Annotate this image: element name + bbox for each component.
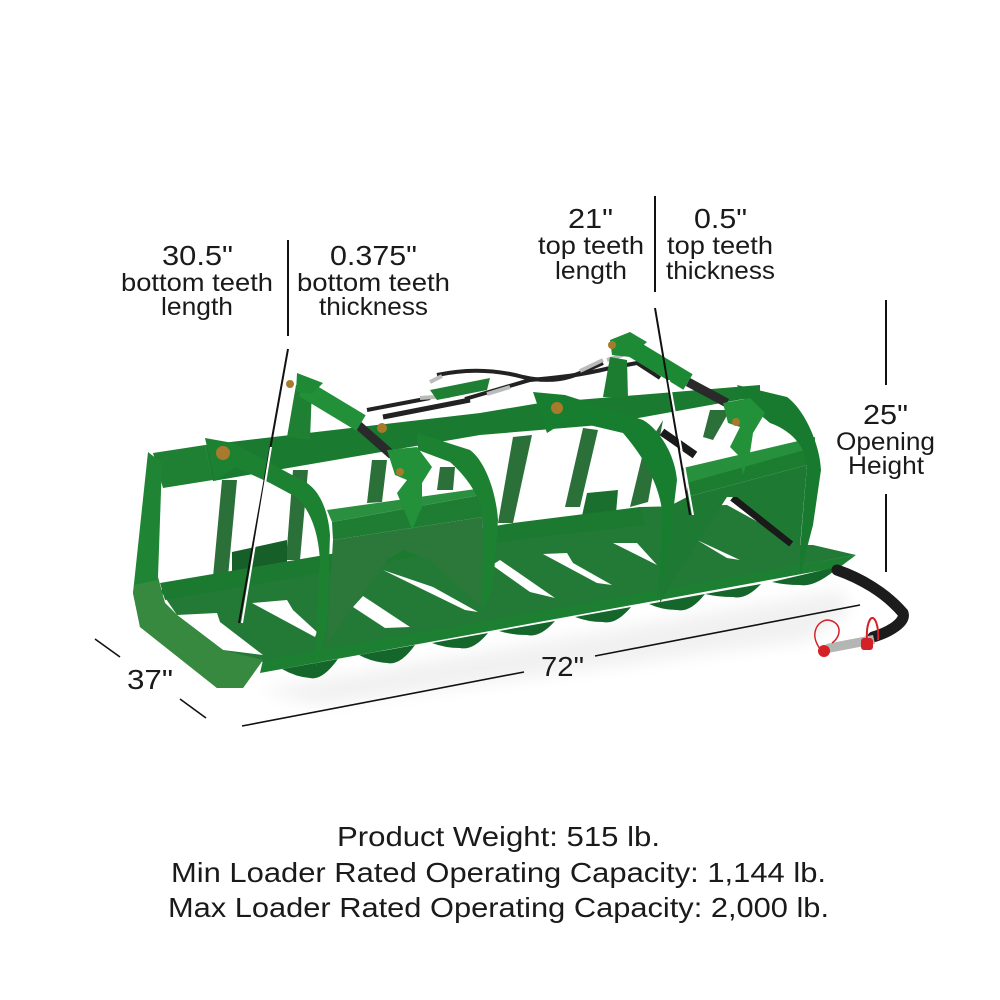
leader line: top teeth — [655, 308, 693, 515]
right grapple plate — [660, 465, 807, 603]
hose fittings — [420, 355, 623, 398]
dimension: opening height: 25" — [863, 399, 908, 430]
left cylinder barrel — [303, 388, 361, 423]
callout: top teeth length: length — [555, 257, 627, 285]
dimension: depth 37 — [95, 639, 206, 718]
left grapple beam front — [332, 493, 492, 540]
left end plate — [133, 452, 263, 688]
callout: top teeth thickness: top teeth — [667, 232, 773, 260]
pivot bolts — [216, 380, 404, 476]
callout: bottom teeth length: length — [161, 293, 233, 321]
right cylinder barrel — [627, 345, 688, 382]
left grapple tower — [287, 385, 312, 440]
callout: top teeth thickness: 0.5" — [694, 203, 747, 234]
callout: bottom teeth length: 30.5" — [162, 240, 233, 271]
specifications text: Max Loader Rated Operating Capacity: 2,000 lb. — [168, 892, 829, 923]
left rail end — [153, 445, 213, 488]
callout: bottom teeth thickness: bottom teeth — [297, 269, 450, 297]
leader line: bottom teeth — [239, 349, 288, 623]
specifications text: Product Weight: 515 lb. — [337, 821, 660, 852]
right grapple beam front — [687, 447, 815, 497]
left grapple arch far — [417, 433, 498, 613]
dimension: width 72 — [242, 605, 860, 726]
callout: bottom teeth length — [121, 240, 273, 321]
floor rail — [160, 507, 645, 600]
dimension: width 72: 72" — [541, 651, 584, 682]
callout: top teeth thickness — [666, 203, 775, 285]
left end plate lower — [133, 580, 263, 688]
callout: top teeth length: top teeth — [538, 232, 644, 260]
back top rail — [205, 385, 760, 481]
right cylinder top mount — [610, 332, 647, 357]
right grapple arch near — [533, 392, 677, 603]
floor with teeth — [160, 505, 856, 662]
divider: bottom teeth callout — [287, 240, 289, 336]
callout: top teeth length: 21" — [568, 203, 613, 234]
floor shadow — [260, 590, 850, 705]
dimension: depth 37: 37" — [127, 664, 173, 695]
gaps between teeth — [177, 540, 740, 655]
front bar — [260, 555, 856, 673]
left cylinder rod — [358, 425, 392, 455]
dimension: opening height: Height — [848, 452, 924, 480]
main hose and couplers — [815, 570, 903, 657]
hose through right window — [733, 497, 792, 543]
hydraulic hoses — [367, 363, 660, 417]
left cylinder lower bracket — [387, 447, 432, 530]
specifications text — [168, 821, 829, 923]
product: root grapple attachment — [133, 332, 903, 688]
left grapple plate — [327, 517, 483, 643]
left grapple arch near — [205, 438, 330, 668]
right grapple tower — [603, 357, 628, 398]
dimension: opening height: Opening — [836, 428, 935, 456]
right cylinder lower bracket — [723, 398, 765, 475]
left cylinder top mount — [296, 373, 323, 394]
specifications text: Min Loader Rated Operating Capacity: 1,144 lb. — [171, 857, 826, 888]
back tabs — [232, 540, 287, 590]
dimension: opening height — [836, 300, 935, 572]
callout: top teeth thickness: thickness — [666, 257, 775, 285]
callout: bottom teeth thickness: thickness — [319, 293, 428, 321]
callout: bottom teeth thickness: 0.375" — [330, 240, 417, 271]
right grapple beam top — [683, 437, 815, 483]
callout: bottom teeth length: bottom teeth — [121, 269, 273, 297]
right cylinder rod — [688, 382, 727, 403]
valve block — [430, 378, 490, 400]
left grapple beam top — [327, 487, 492, 522]
right grapple arch far — [737, 385, 821, 575]
divider: top teeth callout — [654, 196, 656, 292]
callout: bottom teeth thickness — [297, 240, 450, 321]
scalloped teeth undersides — [282, 566, 840, 678]
uprights — [213, 410, 730, 577]
right pivot bolts — [551, 341, 740, 426]
callout: top teeth length — [538, 203, 644, 285]
